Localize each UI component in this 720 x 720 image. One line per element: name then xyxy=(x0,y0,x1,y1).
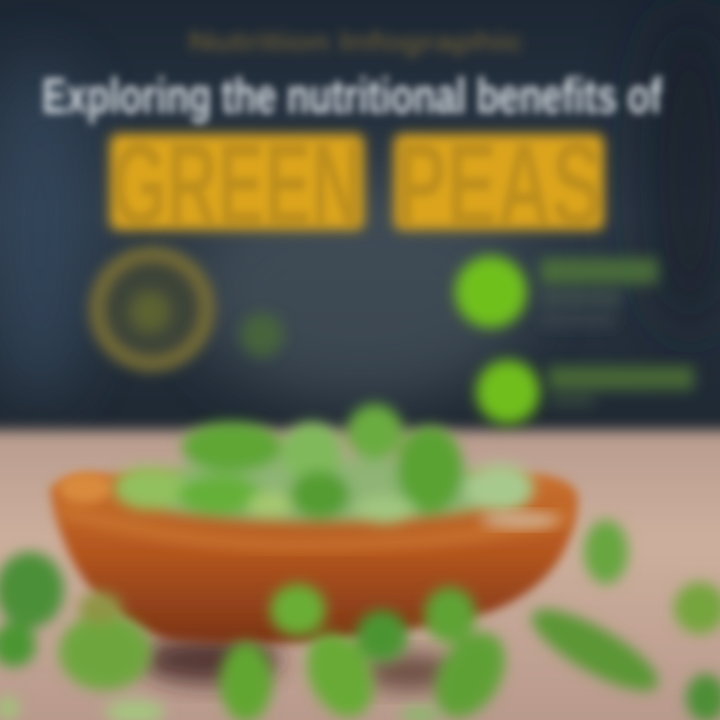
callout: lower green benefit xyxy=(476,360,694,424)
table shadow right of bowl xyxy=(360,654,460,690)
background: wooden table xyxy=(0,430,720,720)
icon: gold circle emblem xyxy=(96,253,208,365)
foreground scattered peas xyxy=(0,520,720,720)
callout: upper green benefit xyxy=(455,256,658,328)
icon: upper green circle xyxy=(455,256,527,328)
bowl shadow xyxy=(140,636,280,684)
icon: lower green circle xyxy=(476,360,540,424)
bowl left rim orange xyxy=(59,473,111,503)
bowl of green peas xyxy=(50,404,578,690)
background: dark slate wall xyxy=(0,0,720,450)
small top heading: Nutrition Infographic xyxy=(188,26,524,57)
lower benefit text xyxy=(548,366,694,406)
pale rim on right xyxy=(480,512,560,528)
peas in bowl xyxy=(114,404,534,524)
icon: small green emblem xyxy=(240,313,284,357)
bowl rim highlight xyxy=(60,510,570,546)
upper benefit text xyxy=(540,258,658,326)
title: green peas: PEAS xyxy=(396,119,602,251)
bowl body xyxy=(50,474,578,644)
title: green peas: GREEN xyxy=(112,119,362,251)
